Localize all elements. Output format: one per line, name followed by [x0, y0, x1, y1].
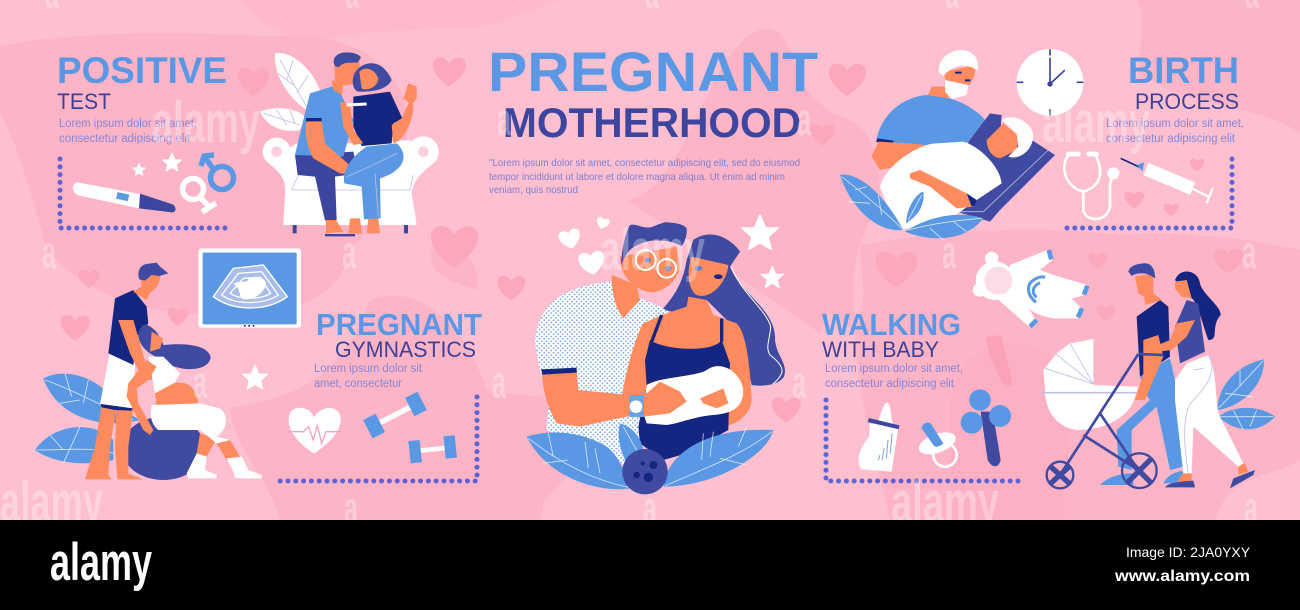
panel: walking with baby	[822, 250, 1275, 488]
footer band	[0, 520, 1300, 610]
title: PREGNANT	[488, 40, 818, 103]
panel: center family illustration	[527, 215, 785, 494]
watermarks: a	[1244, 482, 1258, 534]
icon: stars	[133, 154, 181, 175]
man's arm with test	[340, 102, 363, 145]
icon: small dumbbell	[408, 435, 457, 463]
text: walking description: consectetur adipiscing elit	[825, 378, 955, 390]
icon: baby bottle	[859, 403, 899, 472]
icon: pacifier	[916, 422, 959, 467]
heading: positive test: POSITIVE	[57, 50, 227, 91]
title	[488, 40, 818, 146]
hair highlight	[732, 267, 782, 384]
watermarks: a	[792, 356, 806, 408]
intro text block	[489, 157, 800, 196]
sofa	[263, 136, 439, 233]
exercise ball	[122, 417, 205, 480]
text: gymnastics description: Lorem ipsum dolor sit	[314, 363, 423, 375]
title: MOTHERHOOD	[503, 99, 801, 146]
man	[1100, 263, 1185, 485]
watermarks: a	[42, 226, 56, 278]
text: walking description	[825, 363, 963, 390]
leaves	[840, 175, 983, 240]
dotted frame	[1065, 159, 1232, 228]
woman fringe	[692, 237, 740, 266]
straps	[652, 315, 722, 342]
woman hand	[700, 388, 728, 408]
man neck	[612, 275, 640, 318]
heading: pregnant gymnastics: PREGNANT	[316, 307, 482, 342]
leaves	[260, 53, 322, 131]
heading: pregnant gymnastics	[316, 307, 482, 362]
footer logo: alamy	[50, 533, 152, 592]
clock	[1017, 49, 1083, 116]
heading: positive test	[57, 50, 227, 114]
glasses	[636, 250, 676, 278]
heading: birth process	[1128, 50, 1239, 114]
eyes	[644, 258, 723, 279]
heading: walking with baby	[822, 307, 961, 362]
stroller frame	[1047, 354, 1163, 488]
baby in swaddle	[643, 366, 743, 425]
icon: large dumbbell	[363, 392, 427, 438]
intro text block: veniam, quis nostrud	[489, 184, 578, 196]
text: positive test description	[59, 118, 197, 145]
woman hair	[663, 234, 785, 386]
watermarks: a	[942, 226, 956, 278]
icon: female symbol	[182, 178, 216, 212]
panel: pregnant gymnastics	[35, 248, 482, 481]
dotted frame	[826, 400, 1021, 481]
watermarks: a	[497, 93, 511, 145]
panel: positive test	[57, 50, 439, 236]
man arm	[542, 370, 687, 427]
icon: star	[243, 365, 267, 389]
heading: walking with baby: WITH BABY	[822, 337, 939, 362]
image id: Image ID: 2JA0YXY	[1126, 544, 1251, 560]
illustration: couple on sofa	[260, 52, 439, 236]
leaves	[527, 423, 773, 489]
text: birth description: consectetur adipiscing elit	[1106, 133, 1236, 145]
heading: positive test: TEST	[57, 89, 111, 114]
watch	[629, 395, 644, 417]
woman	[344, 63, 417, 233]
dotted frame	[278, 397, 477, 481]
watermarks: a	[643, 482, 657, 534]
patient	[880, 117, 1033, 230]
watermarks: a	[344, 482, 358, 534]
watermarks: a	[797, 93, 811, 145]
icon: stethoscope	[1064, 154, 1118, 219]
leaves	[35, 373, 140, 463]
icon: heart with pulse	[287, 408, 342, 453]
man shirt	[535, 282, 668, 467]
doctor	[872, 50, 985, 170]
intro text block: "Lorem ipsum dolor sit amet, consectetur adipiscing elit, sed do eiusmod	[489, 157, 800, 169]
baby stroller basket	[1042, 339, 1138, 430]
dotted frame	[60, 159, 226, 228]
bed	[957, 113, 1055, 222]
watermarks: alamy	[891, 470, 999, 535]
icon: pregnancy test stick	[73, 182, 175, 212]
man	[295, 52, 361, 236]
test stick in hand	[347, 99, 367, 109]
text: birth description: Lorem ipsum dolor sit amet,	[1106, 118, 1244, 130]
watermarks: alamy	[152, 90, 260, 155]
leaves	[1217, 359, 1275, 430]
icon: male symbol	[201, 155, 234, 190]
watermarks: alamy	[1042, 90, 1150, 155]
ultrasound monitor	[198, 248, 301, 328]
woman face	[689, 257, 728, 296]
watermarks: a	[193, 356, 207, 408]
text: gymnastics description	[314, 363, 423, 390]
intro text block: tempor incididunt ut labore et dolore magna aliqua. Ut enim ad minim	[489, 171, 785, 183]
woman	[1150, 272, 1255, 488]
hearts and stars	[558, 215, 783, 287]
pregnant woman	[127, 325, 262, 478]
woman top	[638, 340, 730, 460]
panel: birth process	[840, 49, 1244, 240]
flower	[622, 449, 668, 494]
heading: birth process: PROCESS	[1135, 89, 1239, 114]
sleeve	[541, 368, 577, 375]
man	[85, 263, 168, 479]
watermarks: a	[342, 226, 356, 278]
illustration and icons	[840, 49, 1213, 240]
heading: pregnant gymnastics: GYMNASTICS	[335, 337, 476, 362]
icon: syringe	[1121, 158, 1213, 203]
illustration and icons	[859, 250, 1275, 488]
watermarks: a	[1242, 226, 1256, 278]
illustration and icons	[35, 248, 457, 480]
site url: www.alamy.com	[1114, 568, 1250, 585]
watermarks: alamy	[600, 218, 705, 283]
text: walking description: Lorem ipsum dolor sit amet,	[825, 363, 963, 375]
watermarks: a	[492, 356, 506, 408]
text: positive test description: consectetur adipiscing elit	[59, 133, 191, 145]
text: positive test description: Lorem ipsum dolor sit amet,	[59, 118, 197, 130]
heading: birth process: BIRTH	[1128, 50, 1239, 91]
icon: rattle	[961, 389, 1011, 466]
heading: walking with baby: WALKING	[822, 307, 961, 342]
man head	[620, 247, 680, 292]
text: gymnastics description: amet, consectetur	[314, 378, 402, 390]
text: birth description	[1106, 118, 1244, 145]
man hair	[621, 222, 687, 265]
icon: baby onesie	[973, 250, 1087, 327]
woman body	[622, 297, 752, 427]
watermarks: alamy	[0, 470, 103, 535]
